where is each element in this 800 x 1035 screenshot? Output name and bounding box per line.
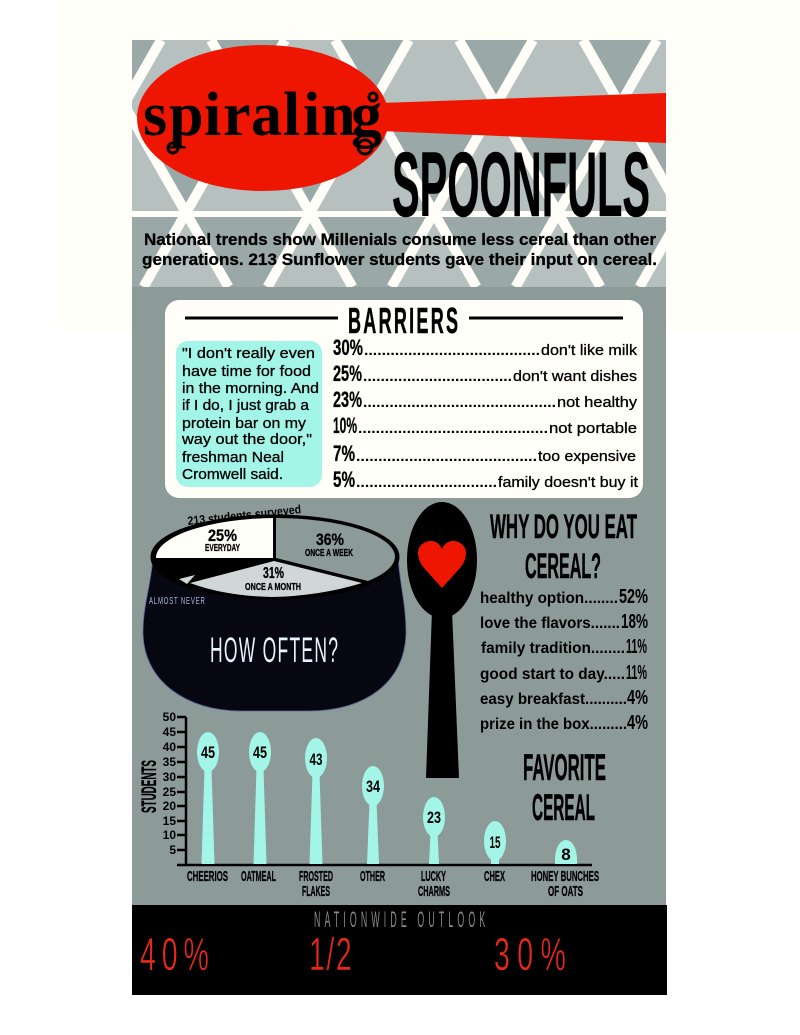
segment: once a week 36%: ONCE A WEEK (305, 548, 354, 559)
list: reasons for eating cereal: prize in the box......... (480, 716, 627, 733)
y axis: 50 (163, 710, 176, 724)
quote box (176, 341, 322, 487)
chart: how often bowl pie (143, 502, 406, 711)
quote box: "I don't really even (182, 345, 315, 362)
bar: oatmeal 45: 45 (253, 743, 267, 762)
y axis (138, 710, 592, 865)
segment: everyday 25%: 25% (208, 526, 237, 545)
rim (153, 517, 397, 597)
y axis: 30 (163, 770, 176, 784)
list: reasons for eating cereal: 11% (626, 662, 647, 684)
bar: honey bunches of oats 8: OF OATS (548, 883, 583, 900)
chart: favorite cereal spoon bars: FROSTED (299, 868, 333, 885)
stat: 1/2: 1/2 (309, 929, 352, 981)
main grey panel (132, 287, 666, 905)
red spoon illustration (137, 45, 666, 191)
quote box: if I do, I just grab a (182, 397, 310, 414)
icon: black spoon with heart (407, 502, 477, 778)
list: reasons for eating cereal (480, 586, 648, 734)
segment: almost never: ALMOST NEVER (149, 596, 205, 606)
stat: 30%: 30% (494, 929, 566, 981)
barriers list: too expensive (538, 448, 636, 465)
segment: once a month 31% (190, 561, 362, 597)
footer heading: NATIONWIDE OUTLOOK (314, 907, 485, 932)
barriers list: family doesn't buy it (498, 474, 639, 491)
y axis: 5 (169, 843, 176, 857)
quote box: way out the door," (181, 431, 312, 448)
list: reasons for eating cereal: love the flavors....... (480, 615, 620, 632)
y axis: 15 (163, 814, 176, 828)
bar: oatmeal 45 (241, 732, 276, 885)
list: reasons for eating cereal: 4% (627, 712, 648, 734)
bar: frosted flakes 43: 43 (310, 750, 322, 769)
barriers list: 30% (333, 335, 363, 360)
barriers list: ......................................... (356, 448, 537, 465)
barriers list: don't want dishes (513, 368, 637, 385)
bar: lucky charms 23: LUCKY (421, 868, 446, 885)
heading: why do you eat cereal: CEREAL? (525, 547, 601, 586)
segment: once a week 36%: 36% (316, 530, 344, 549)
title: spiraling: spiraling (143, 81, 382, 149)
list: reasons for eating cereal: family tradition........ (481, 640, 625, 657)
y axis: 10 (163, 828, 176, 842)
bar: lucky charms 23: 23 (427, 808, 441, 827)
barriers list: not healthy (557, 394, 638, 411)
bar: honey bunches of oats 8: HONEY BUNCHES (531, 868, 599, 885)
y axis: 45 (163, 725, 176, 739)
barriers list: .................................. (363, 368, 512, 385)
segment: everyday 25%: EVERYDAY (205, 543, 240, 554)
panel: barriers (165, 300, 643, 498)
barriers list: 5% (333, 467, 355, 492)
y axis: 25 (163, 785, 176, 799)
chart: favorite cereal spoon bars: OATMEAL (241, 868, 276, 885)
barriers heading: BARRIERS (348, 301, 458, 342)
bar: chex 15: CHEX (484, 868, 505, 885)
barriers list: 25% (333, 361, 362, 386)
list: reasons for eating cereal: healthy option........ (480, 590, 618, 607)
barriers list: 10% (333, 413, 357, 438)
list: reasons for eating cereal: 4% (627, 687, 648, 709)
list: reasons for eating cereal: easy breakfast.......... (480, 691, 627, 708)
barriers list: 23% (333, 387, 362, 412)
text: WHY DO YOU EAT (490, 508, 637, 546)
barriers list (333, 335, 639, 492)
segment: once a month 31%: ONCE A MONTH (245, 582, 301, 593)
heading: why do you eat cereal (490, 508, 637, 586)
bar: other 34: 34 (366, 777, 380, 796)
intro text (142, 230, 657, 269)
survey note: 213 students surveyed (187, 502, 302, 528)
segment: everyday 25% (156, 518, 273, 558)
y axis: 35 (163, 755, 176, 769)
barriers list: 7% (333, 441, 355, 466)
text: FAVORITE (523, 747, 606, 788)
bowl caption: HOW OFTEN? (210, 630, 338, 670)
bar: honey bunches of oats 8: 8 (561, 845, 571, 864)
intro text: National trends show Millenials consume less cereal than other (144, 230, 656, 249)
heading: favorite cereal (523, 747, 606, 828)
quote box: in the morning. And (182, 380, 319, 397)
quote box: have time for food (182, 363, 311, 380)
barriers list: don't like milk (541, 342, 638, 359)
y axis: 40 (163, 740, 176, 754)
segment: almost never (149, 575, 205, 606)
barriers list: ........................................ (364, 342, 540, 359)
list: reasons for eating cereal: 52% (619, 586, 648, 608)
bar: other 34 (360, 766, 385, 885)
bar: chex 15 (484, 821, 506, 885)
icon: heart (418, 541, 466, 588)
bar: honey bunches of oats 8 (531, 840, 599, 900)
bowl body (143, 557, 406, 711)
quote box: freshman Neal (182, 449, 284, 466)
chart: favorite cereal spoon bars: OTHER (360, 868, 385, 885)
barriers list: ............................................ (363, 394, 556, 411)
y axis: 20 (163, 799, 176, 813)
barriers list: ........................................... (358, 420, 548, 437)
bar: cheerios 45: CHEERIOS (187, 868, 228, 885)
quote box: Cromwell said. (182, 466, 283, 483)
list: reasons for eating cereal: 18% (621, 611, 648, 633)
header: triangle pattern background (132, 40, 666, 287)
bar: frosted flakes 43 (299, 738, 333, 900)
list: reasons for eating cereal: 11% (626, 636, 647, 658)
text: CEREAL (532, 787, 595, 828)
intro text: generations. 213 Sunflower students gave their input on cereal. (142, 250, 657, 269)
barriers list: ................................ (356, 474, 497, 491)
bar: cheerios 45 (187, 732, 228, 885)
y axis: STUDENTS (138, 760, 161, 813)
bar: chex 15: 15 (490, 833, 500, 852)
bar: cheerios 45: 45 (201, 743, 215, 762)
bar: frosted flakes 43: FLAKES (302, 883, 330, 900)
chart: favorite cereal spoon bars: CHARMS (418, 883, 450, 900)
barriers list: not portable (549, 420, 637, 437)
quote box: protein bar on my (182, 415, 307, 432)
list: reasons for eating cereal: good start to day..... (480, 666, 625, 683)
bar: lucky charms 23 (418, 797, 450, 900)
stat: 40%: 40% (140, 929, 209, 981)
panel: nationwide outlook footer (132, 905, 667, 995)
chart: favorite cereal spoon bars (138, 710, 599, 900)
segment: once a week 36% (276, 518, 395, 581)
segment: once a month 31%: 31% (263, 565, 284, 582)
